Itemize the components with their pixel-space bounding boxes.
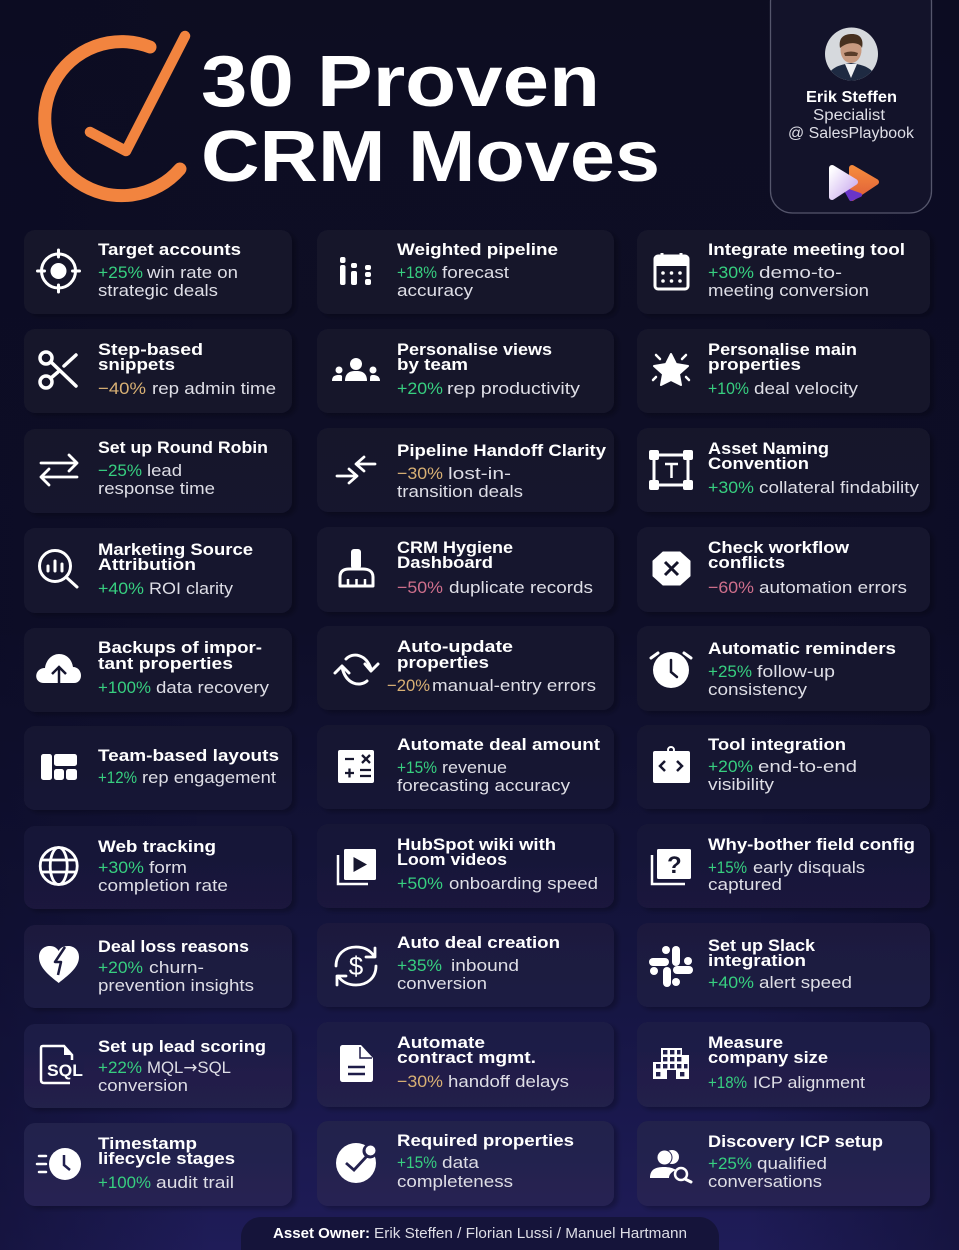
card: HubSpot wiki with Loom videos — [317, 824, 614, 908]
title: Weighted pipeline — [397, 240, 558, 259]
author role: Specialist — [813, 107, 886, 124]
metric: +40% — [98, 579, 144, 598]
metric: +25% — [708, 662, 752, 681]
metric: inbound — [451, 956, 519, 975]
metric: data recovery — [156, 678, 270, 697]
icon: SQL file: SQL — [47, 1061, 83, 1080]
metric: audit trail — [156, 1173, 234, 1192]
metric: duplicate records — [449, 578, 593, 597]
icon: code clipboard — [653, 747, 690, 783]
title: CRM Hygiene — [397, 538, 513, 557]
title: tant properties — [98, 654, 233, 673]
icon: SQL file — [41, 1046, 84, 1083]
metric — [98, 379, 276, 398]
metric: +22% — [98, 1058, 142, 1077]
title: properties — [397, 653, 489, 672]
metric: +30% — [708, 478, 754, 497]
title: conflicts — [708, 553, 785, 572]
icon: star with sparks — [653, 354, 689, 385]
metric — [98, 958, 254, 995]
metric: forecast — [442, 263, 509, 282]
icon: text frame — [649, 450, 693, 490]
metric: +40% — [708, 973, 754, 992]
metric — [708, 1154, 827, 1191]
card: Automate deal amount — [317, 725, 614, 809]
metric — [708, 757, 857, 794]
logo: orange circle with check mark — [45, 36, 185, 196]
title: Auto deal creation — [397, 933, 560, 952]
title — [98, 638, 262, 673]
title: Team-based layouts — [98, 746, 279, 765]
metric — [98, 1058, 231, 1095]
metric: +30% — [98, 858, 144, 877]
metric: +18% — [397, 263, 437, 282]
card: CRM Hygiene Dashboard — [317, 527, 614, 612]
card: Tool integration — [637, 725, 930, 809]
title: Personalise views — [397, 340, 552, 359]
card: Marketing Source Attribution — [24, 528, 292, 613]
icon: refresh arrows — [335, 655, 378, 684]
icon: swap arrows — [41, 455, 77, 485]
metric: MQL→SQL — [147, 1058, 231, 1078]
icon: team — [332, 358, 380, 381]
icon: globe — [40, 848, 77, 884]
metric: consistency — [708, 680, 808, 699]
card: Auto deal creation — [317, 923, 614, 1007]
title: by team — [397, 355, 468, 374]
icon: question stack — [652, 849, 691, 884]
card: Automate contract mgmt. — [317, 1022, 614, 1107]
icon: users search — [650, 1150, 691, 1182]
metric: lost-in- — [448, 464, 511, 483]
icon: brush — [340, 549, 373, 586]
metric: end-to-end — [758, 757, 857, 776]
icon: calendar — [655, 253, 688, 289]
title — [708, 538, 850, 572]
metric — [397, 758, 571, 795]
card: Measure company size — [637, 1022, 930, 1107]
icon: building — [653, 1048, 689, 1079]
metric: +20% — [98, 958, 143, 977]
metric: +30% — [708, 263, 754, 282]
metric: rep admin time — [152, 379, 276, 398]
card: Backups of important properties — [24, 628, 292, 712]
metric: −50% — [397, 578, 443, 597]
metric — [98, 678, 270, 697]
metric: +25% — [708, 1154, 752, 1173]
icon: broken heart — [39, 946, 79, 983]
metric: +12% — [98, 768, 137, 787]
icon: fast clock — [37, 1148, 81, 1180]
metric — [98, 1173, 234, 1192]
metric — [98, 461, 215, 498]
metric: collateral findability — [759, 478, 920, 497]
metric — [708, 478, 920, 497]
author photo — [824, 27, 880, 82]
icon: layout blocks — [41, 754, 77, 780]
card: Integrate meeting tool — [637, 230, 930, 314]
metric: transition deals — [397, 482, 523, 501]
card: Automatic reminders — [637, 626, 930, 711]
title: Required properties — [397, 1131, 574, 1150]
metric: conversion — [397, 974, 487, 993]
title — [98, 1134, 235, 1168]
metric: −40% — [98, 379, 146, 398]
title — [98, 340, 203, 374]
metric: qualified — [757, 1154, 827, 1173]
card: Personalise main properties — [637, 329, 930, 413]
metric: −30% — [397, 1072, 443, 1091]
metric: alert speed — [759, 973, 852, 992]
icon: slack logo — [649, 946, 693, 987]
icon: dollar cycle — [336, 947, 376, 985]
title: Dashboard — [397, 553, 493, 572]
metric: accuracy — [397, 281, 474, 300]
title — [397, 538, 513, 572]
title: Asset Naming — [708, 439, 829, 458]
metric: deal velocity — [754, 379, 859, 398]
title: Automate deal amount — [397, 735, 600, 754]
icon: scissors — [40, 352, 76, 388]
metric — [708, 973, 852, 992]
icon: target — [38, 250, 80, 292]
metric: churn- — [149, 958, 204, 977]
metric: manual-entry errors — [432, 676, 596, 695]
title: lifecycle stages — [98, 1149, 235, 1168]
metric: −60% — [708, 578, 754, 597]
metric: onboarding speed — [449, 874, 598, 893]
metric: response time — [98, 479, 215, 498]
metric: ROI clarity — [149, 579, 234, 598]
card: Asset Naming Convention — [637, 428, 930, 512]
metric — [397, 464, 523, 501]
icon: bars — [340, 257, 371, 285]
metric: early disquals — [753, 858, 865, 877]
icon: video stack — [338, 849, 376, 884]
metric: −30% — [397, 464, 443, 483]
metric: rep productivity — [447, 379, 581, 398]
title: Pipeline Handoff Clarity — [397, 441, 607, 460]
card: Discovery ICP setup — [637, 1121, 930, 1206]
metric: form — [149, 858, 187, 877]
card: Auto-update properties — [317, 626, 614, 710]
title: HubSpot wiki with — [397, 835, 556, 854]
author company: @ SalesPlaybook — [788, 125, 914, 142]
metric — [98, 579, 234, 598]
metric: win rate on — [146, 263, 238, 282]
metric: follow-up — [757, 662, 835, 681]
title: CRM Moves — [201, 117, 660, 197]
metric: meeting conversion — [708, 281, 869, 300]
title: Personalise main — [708, 340, 857, 359]
title — [201, 42, 660, 197]
card: Set up Round Robin — [24, 429, 292, 513]
title — [98, 540, 253, 574]
icon: converging arrows — [337, 457, 375, 483]
metric — [397, 874, 598, 893]
title: Check workflow — [708, 538, 850, 557]
metric: +15% — [708, 858, 747, 877]
title: contract mgmt. — [397, 1048, 536, 1067]
icon: question stack: ? — [667, 852, 682, 879]
card: Set up lead scoring — [24, 1024, 292, 1108]
icon: octagon x — [653, 552, 690, 585]
title — [397, 340, 552, 374]
icon: calculator — [338, 750, 374, 783]
title — [708, 439, 829, 473]
card: Target accounts — [24, 230, 292, 314]
metric: +100% — [98, 1173, 151, 1192]
icon: document — [340, 1045, 373, 1082]
metric — [98, 768, 276, 787]
card: Team-based layouts — [24, 726, 292, 810]
title: 30 Proven — [201, 42, 600, 122]
metric: captured — [708, 875, 782, 894]
title: Step-based — [98, 340, 203, 359]
icon: check badge — [336, 1143, 378, 1183]
metric: ICP alignment — [753, 1073, 865, 1092]
title: Convention — [708, 454, 809, 473]
metric: +100% — [98, 678, 151, 697]
title: Integrate meeting tool — [708, 240, 905, 259]
title: Set up Slack — [708, 936, 816, 955]
metric — [708, 858, 865, 894]
metric: prevention insights — [98, 976, 254, 995]
metric: +15% — [397, 1153, 437, 1172]
footer names: Erik Steffen / Florian Lussi / Manuel Hartmann — [374, 1226, 687, 1242]
metric: −20% — [387, 676, 430, 695]
title: Automate — [397, 1033, 485, 1052]
metric — [397, 263, 509, 300]
metric — [397, 956, 519, 993]
metric: data — [442, 1153, 480, 1172]
card: Why-bother field config — [637, 824, 930, 908]
title: company size — [708, 1048, 828, 1067]
metric: +10% — [708, 379, 749, 398]
card: Weighted pipeline — [317, 230, 614, 314]
card: Check workflow conflicts — [637, 527, 930, 612]
title: snippets — [98, 355, 175, 374]
metric: +25% — [98, 263, 143, 282]
metric: rep engagement — [142, 768, 276, 787]
metric: +20% — [708, 757, 753, 776]
title: Marketing Source — [98, 540, 253, 559]
metric: +15% — [397, 758, 437, 777]
card: Web tracking — [24, 826, 292, 909]
metric — [708, 263, 869, 300]
metric: revenue — [442, 758, 507, 777]
title — [708, 1033, 828, 1067]
card: Step-based snippets — [24, 329, 292, 413]
title — [397, 1033, 536, 1067]
footer label: Asset Owner: — [273, 1226, 370, 1242]
title: Why-bother field config — [708, 835, 915, 854]
card: Pipeline Handoff Clarity — [317, 428, 614, 512]
card: Personalise views by team — [317, 329, 614, 413]
metric: completeness — [397, 1172, 513, 1191]
title: Auto-update — [397, 637, 513, 656]
title: Target accounts — [98, 240, 241, 259]
metric: conversion — [98, 1076, 188, 1095]
card: Deal loss reasons — [24, 925, 292, 1008]
title: Measure — [708, 1033, 783, 1052]
metric: forecasting accuracy — [397, 776, 571, 795]
metric: visibility — [708, 775, 775, 794]
metric: automation errors — [759, 578, 907, 597]
title — [397, 835, 556, 869]
title: integration — [708, 951, 806, 970]
metric: +18% — [708, 1073, 747, 1092]
metric — [708, 578, 907, 597]
metric — [397, 379, 581, 398]
metric: demo-to- — [759, 263, 842, 282]
title — [397, 637, 513, 672]
metric — [98, 858, 228, 895]
title: Set up lead scoring — [98, 1037, 266, 1056]
metric: −25% — [98, 461, 142, 480]
title: Loom videos — [397, 850, 507, 869]
metric — [98, 263, 238, 300]
title: Set up Round Robin — [98, 438, 268, 457]
title: Backups of impor- — [98, 638, 262, 657]
metric — [397, 578, 593, 597]
title: properties — [708, 355, 801, 374]
title — [708, 936, 816, 970]
icon: dollar cycle: $ — [349, 951, 364, 981]
card: Timestamp lifecycle stages — [24, 1123, 292, 1206]
metric — [397, 1072, 569, 1091]
metric — [708, 662, 835, 699]
metric — [397, 1153, 513, 1191]
icon: cloud upload — [36, 654, 81, 684]
metric: lead — [147, 461, 182, 480]
author name: Erik Steffen — [806, 89, 897, 106]
metric — [708, 1073, 865, 1092]
icon: SalesPlaybook play logo — [832, 168, 876, 199]
title: Tool integration — [708, 735, 846, 754]
metric: +50% — [397, 874, 443, 893]
title: Automatic reminders — [708, 639, 896, 658]
metric: +35% — [397, 956, 442, 975]
metric: +20% — [397, 379, 443, 398]
metric: completion rate — [98, 876, 228, 895]
title: Discovery ICP setup — [708, 1132, 883, 1151]
metric: handoff delays — [448, 1072, 569, 1091]
metric: strategic deals — [98, 281, 218, 300]
title: Web tracking — [98, 837, 216, 856]
card: Set up Slack integration — [637, 923, 930, 1007]
footer: asset owner pill — [241, 1217, 719, 1250]
title: Deal loss reasons — [98, 937, 249, 956]
icon: alarm clock — [651, 652, 691, 688]
panel: author profile — [770, 0, 932, 213]
metric: conversations — [708, 1172, 822, 1191]
metric — [708, 379, 859, 398]
icon: magnifier chart — [40, 550, 77, 587]
title: Timestamp — [98, 1134, 197, 1153]
card: Required properties — [317, 1121, 614, 1206]
title — [708, 340, 857, 374]
title: Attribution — [98, 555, 196, 574]
